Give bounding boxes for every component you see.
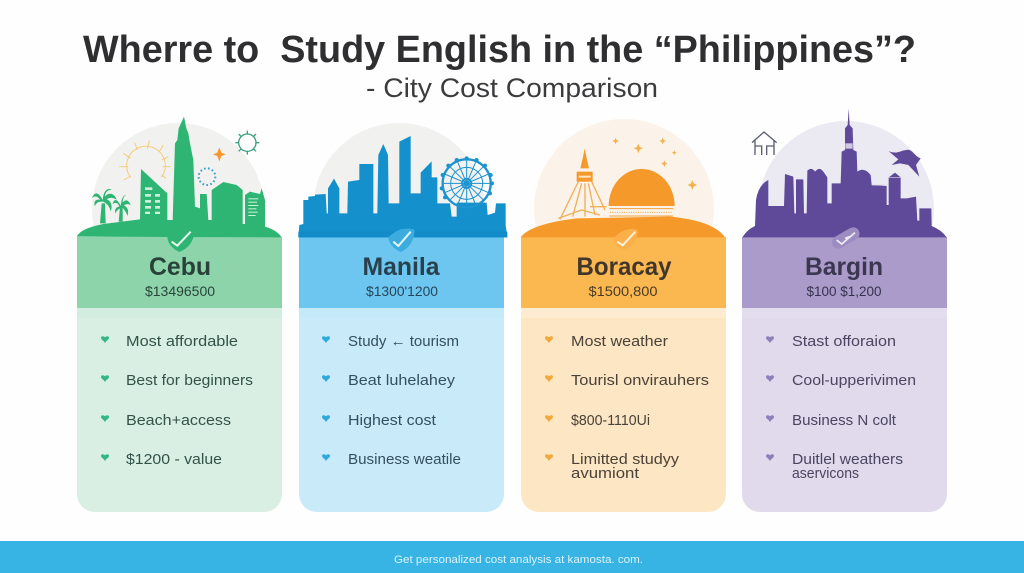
Boracay dome backdrop bbox=[534, 119, 714, 299]
Manila list bbox=[322, 333, 461, 468]
panel: Bargin bbox=[742, 108, 947, 512]
Cebu list body bbox=[77, 290, 282, 512]
Bargin list bbox=[766, 333, 916, 482]
Bargin name: Bargin bbox=[805, 253, 883, 281]
Bargin header band bbox=[742, 237, 947, 308]
Manila name: Manila bbox=[362, 253, 441, 281]
Cebu list bbox=[101, 333, 253, 468]
Boracay header band bbox=[521, 237, 726, 308]
Boracay price: $1500,800 bbox=[588, 283, 658, 299]
Cebu price: $13496500 bbox=[145, 283, 215, 299]
panel: Manila bbox=[298, 123, 507, 512]
Boracay list: $800-1110Ui bbox=[571, 412, 650, 429]
Bargin list: Cool-upperivimen bbox=[792, 372, 916, 389]
Manila skyline illustration bbox=[298, 136, 507, 237]
Manila header band bbox=[299, 237, 504, 308]
Bargin skyline illustration bbox=[742, 108, 947, 237]
panel: Cebu bbox=[77, 117, 282, 512]
Boracay list: Tourisl onvirauhers bbox=[571, 372, 709, 389]
Boracay illustration bbox=[521, 138, 725, 237]
Bargin list: Stast offoraion bbox=[792, 333, 896, 350]
Manila list: Beat luhelahey bbox=[348, 372, 456, 389]
Cebu list: Most affordable bbox=[126, 333, 238, 350]
Bargin list: Duitlel weathers bbox=[792, 451, 903, 468]
footer banner bbox=[0, 541, 1024, 573]
Cebu dome backdrop bbox=[92, 123, 264, 295]
subtitle: - City Cost Comparison bbox=[366, 73, 658, 103]
Cebu skyline illustration bbox=[77, 117, 282, 237]
panel: Boracay bbox=[521, 119, 726, 512]
Boracay list: Most weather bbox=[571, 333, 668, 350]
Cebu header band bbox=[77, 237, 282, 308]
Manila dome backdrop bbox=[313, 123, 485, 295]
Manila list body bbox=[299, 290, 504, 512]
Cebu name: Cebu bbox=[149, 253, 211, 281]
Cebu list: Beach+access bbox=[126, 412, 231, 429]
Boracay list: avumiont bbox=[571, 465, 640, 482]
Manila list: Study ← tourism bbox=[348, 333, 459, 350]
Manila price: $1300'1200 bbox=[366, 283, 438, 299]
Cebu list: $1200 - value bbox=[126, 451, 222, 468]
Boracay list: Limitted studyy bbox=[571, 451, 680, 468]
Bargin list: aservicons bbox=[792, 465, 859, 482]
Boracay name: Boracay bbox=[576, 253, 672, 281]
Boracay list body bbox=[521, 290, 726, 512]
Bargin dome backdrop bbox=[758, 121, 934, 297]
Bargin badge bbox=[830, 225, 862, 251]
Bargin list body bbox=[742, 290, 947, 512]
Bargin price: $100 $1,200 bbox=[806, 283, 882, 299]
Cebu badge bbox=[167, 229, 195, 252]
footer text: Get personalized cost analysis at kamosta. com. bbox=[394, 554, 643, 566]
title: Wherre to Study English in the “Philippines”? bbox=[83, 29, 916, 71]
Manila badge bbox=[388, 229, 415, 252]
Boracay list bbox=[545, 333, 709, 482]
Manila list: Business weatile bbox=[348, 451, 461, 468]
Cebu list: Best for beginners bbox=[126, 372, 253, 389]
Bargin list: Business N colt bbox=[792, 412, 897, 429]
Boracay badge bbox=[613, 229, 638, 251]
Manila list: Highest cost bbox=[348, 412, 437, 429]
